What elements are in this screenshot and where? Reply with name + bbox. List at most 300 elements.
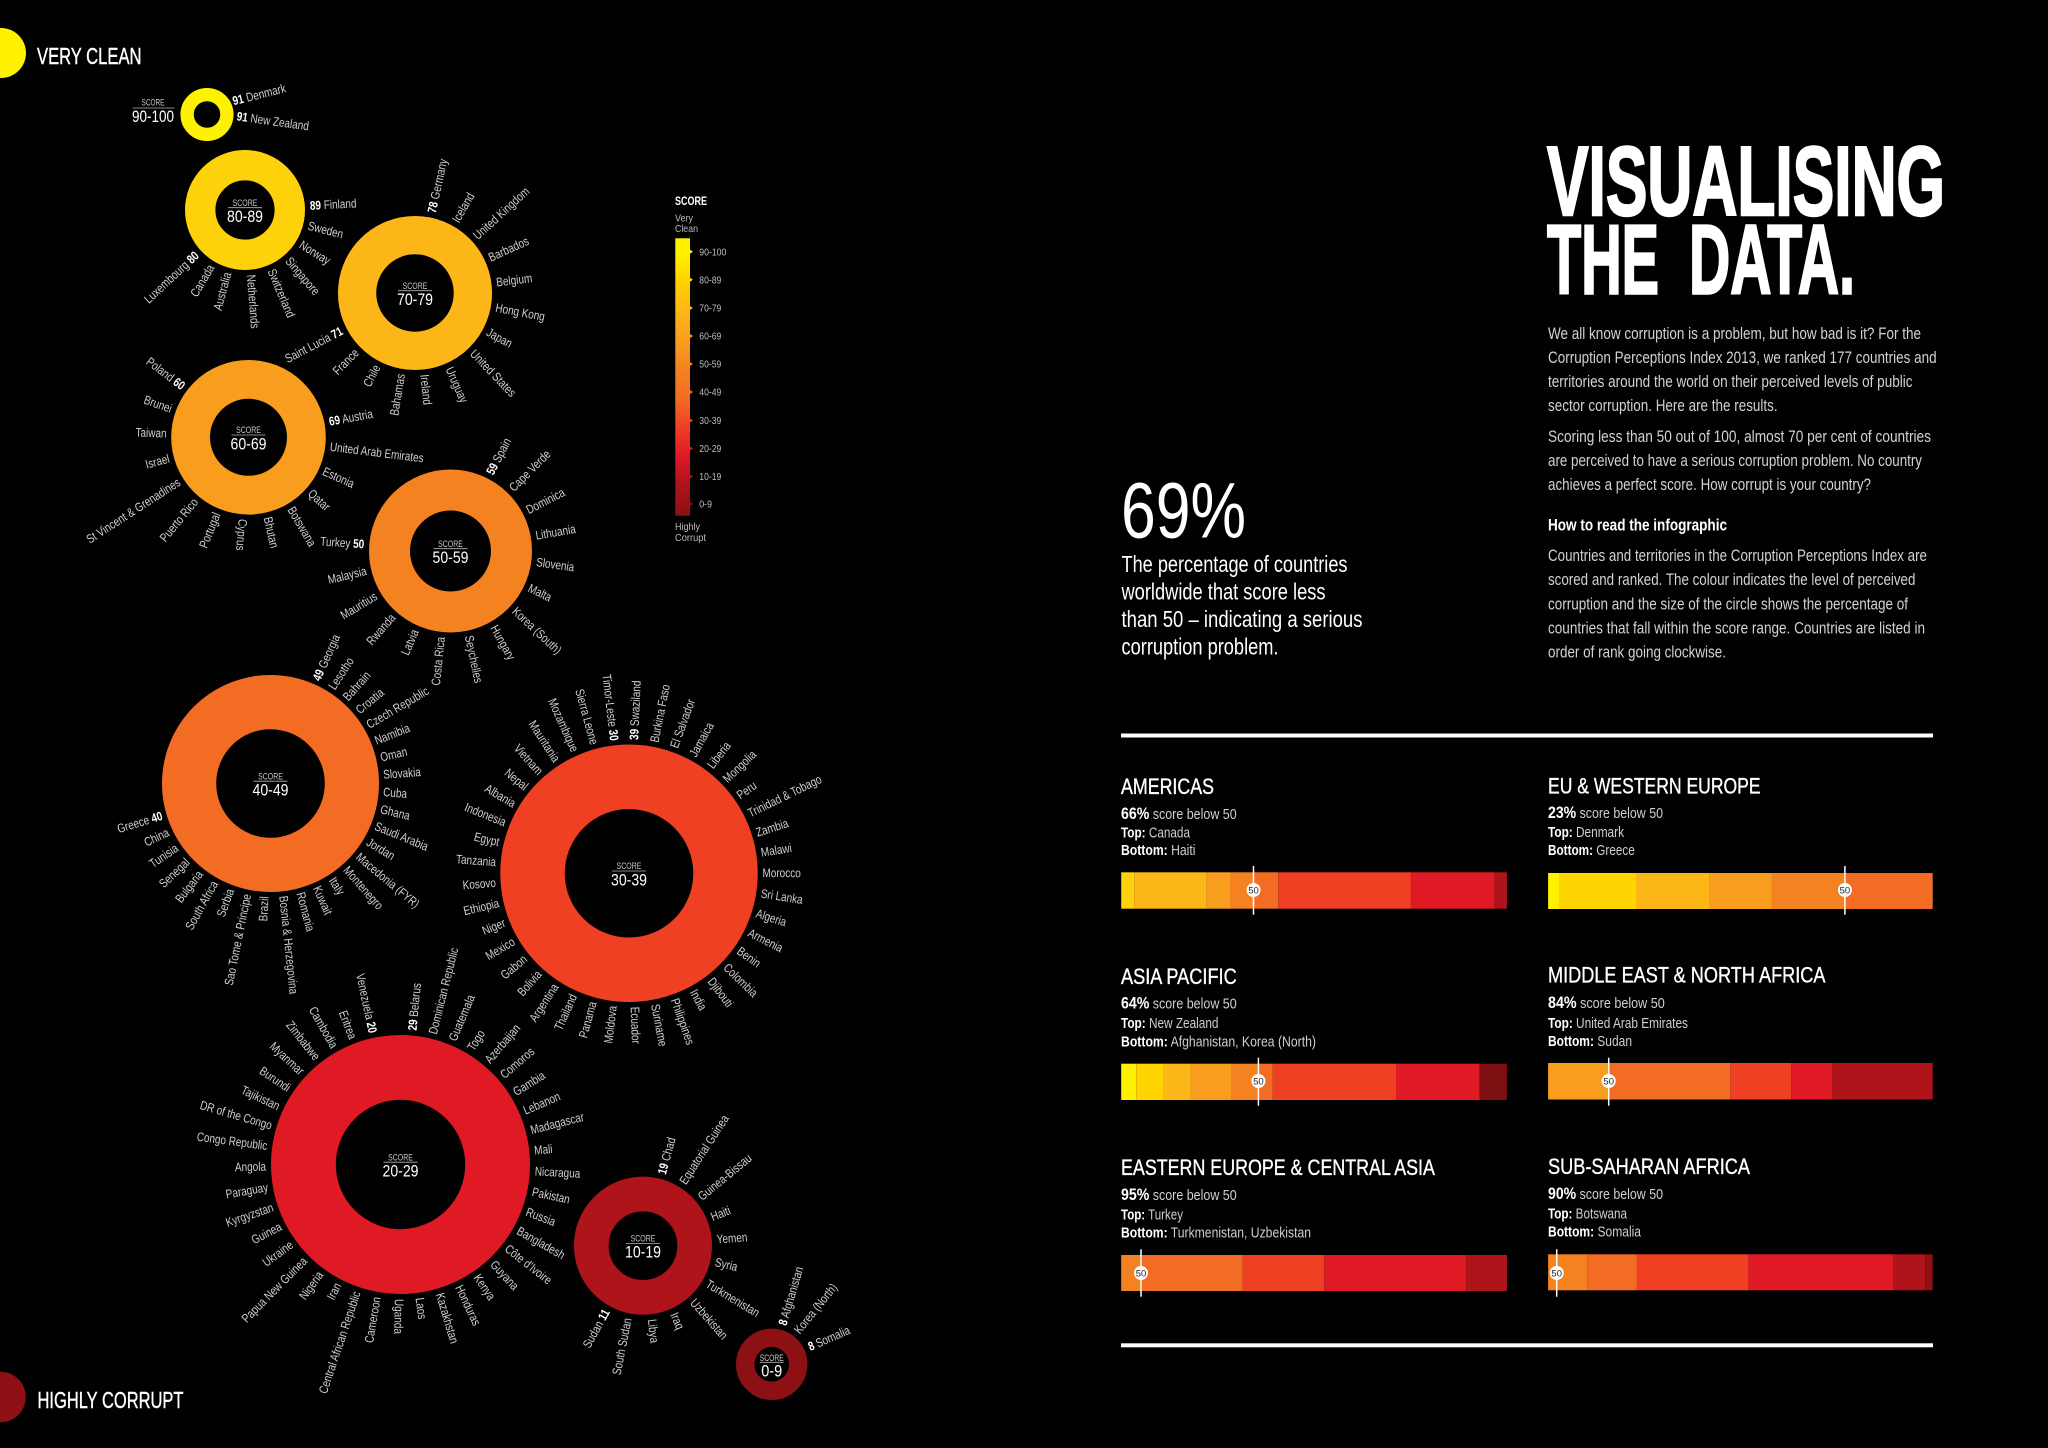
country labels 30-39: Albania	[482, 782, 518, 811]
country labels 20-29: Bangladesh	[514, 1225, 567, 1262]
country labels 20-29: Dominican Republic	[427, 946, 462, 1036]
country labels 60-69: Cyprus	[233, 519, 249, 551]
country labels 70-79: Japan	[484, 326, 514, 351]
country labels 40-49: Jordan	[364, 836, 397, 863]
marker: 50: 50	[1603, 1076, 1614, 1088]
panel: score 70-79 ring: SCORE	[403, 281, 427, 291]
country labels 70-79	[283, 158, 546, 417]
country labels 40-49: Namibia	[373, 722, 413, 748]
country labels 20-29: Zimbabwe	[283, 1019, 322, 1063]
callout: 69 percent: corruption problem.	[1122, 634, 1278, 660]
panel: score 40-49 ring: SCORE	[258, 771, 283, 781]
country labels 20-29: Madagascar	[529, 1111, 586, 1137]
text block: introduction: sector corruption. Here are the results.	[1548, 396, 1778, 415]
country labels 20-29: DR of the Congo	[198, 1099, 273, 1133]
marker: 50	[1246, 866, 1260, 915]
bar: Sub-Saharan Africa	[1548, 1254, 1933, 1290]
country labels 60-69: United Arab Emirates	[329, 441, 425, 466]
panel: Americas: 66% score below 50	[1121, 804, 1237, 823]
country labels 50-59: Mauritius	[339, 590, 380, 623]
panel: score 50-59 ring: SCORE	[438, 539, 463, 549]
country labels 80-89: Switzerland	[264, 267, 297, 320]
country labels 20-29: Central African Republic	[317, 1290, 364, 1396]
country labels 20-29: Venezuela 20	[353, 973, 379, 1034]
country labels 20-29: 29 Belarus	[407, 982, 424, 1031]
country labels 20-29: Laos	[412, 1297, 428, 1320]
country labels 50-59: Malta	[526, 582, 554, 605]
country labels 80-89: 89 Finland	[310, 198, 357, 213]
country labels 50-59: Korea (South)	[509, 605, 564, 658]
text block: introduction: are perceived to have a serious corruption problem. No country	[1548, 451, 1922, 470]
panel: EU and Western Europe: Bottom: Greece	[1548, 842, 1635, 859]
panel: score 70-79 ring	[283, 158, 546, 417]
panel: EU and Western Europe: 23% score below 50	[1548, 803, 1663, 822]
marker: 50: 50	[1840, 886, 1850, 896]
country labels 30-39: Morocco	[762, 867, 801, 881]
panel: score 40-49 ring	[116, 632, 432, 995]
panel: Eastern Europe and Central Asia: Bottom: Turkmenistan, Uzbekistan	[1121, 1224, 1311, 1241]
country labels 30-39: Trinidad & Tobago	[746, 773, 824, 821]
panel: Middle East and North Africa: Bottom: Sudan	[1548, 1033, 1632, 1050]
country labels 40-49: Serbia	[215, 887, 238, 919]
country labels 30-39: Burkina Faso	[649, 683, 673, 744]
text block: introduction: territories around the world on their perceived levels of public	[1548, 372, 1913, 391]
country labels 50-59: Turkey 50	[320, 536, 365, 552]
panel: Middle East and North Africa: Top: United Arab Emirates	[1548, 1015, 1688, 1032]
country labels 60-69: 69 Austria	[328, 408, 375, 429]
country labels 20-29: Guinea	[250, 1220, 285, 1247]
country labels 50-59: Rwanda	[365, 611, 399, 648]
country labels 50-59: Seychelles	[462, 634, 484, 685]
country labels 0-9: Korea (North)	[792, 1281, 841, 1337]
bar: Middle East and North Africa	[1548, 1063, 1933, 1100]
country labels 30-39: Ecuador	[627, 1006, 642, 1044]
country labels 70-79: Saint Lucia 71	[283, 325, 345, 366]
country labels 10-19	[581, 1112, 761, 1376]
legend: score colour scale: 10-19	[699, 472, 722, 483]
panel: score 60-69 ring: SCORE	[236, 425, 261, 435]
country labels 80-89: Singapore	[282, 255, 322, 298]
text block: how to read	[1548, 546, 1927, 662]
legend: score colour scale: Clean	[675, 224, 698, 235]
country labels 20-29: Angola	[235, 1161, 267, 1175]
panel: score 90-100 ring: SCORE	[142, 98, 164, 108]
marker: 50	[1838, 866, 1852, 915]
marker: 50: 50	[1248, 886, 1259, 896]
country labels 40-49: Bosnia & Herzegovina	[276, 895, 300, 995]
country labels 30-39	[456, 674, 824, 1048]
country labels 30-39: India	[687, 988, 709, 1013]
country labels 20-29: Ukraine	[260, 1239, 296, 1270]
panel: EU and Western Europe: Top: Denmark	[1548, 824, 1624, 841]
country labels 80-89: Sweden	[306, 220, 345, 242]
country labels 10-19: Libya	[645, 1319, 660, 1344]
country labels 60-69: Estonia	[320, 465, 357, 492]
country labels 40-49: Ghana	[379, 803, 412, 823]
text block: how to read: order of rank going clockwise.	[1548, 642, 1726, 662]
panel: Eastern Europe and Central Asia: EASTERN EUROPE & CENTRAL ASIA	[1121, 1155, 1435, 1180]
legend: score colour scale: 70-79	[699, 304, 722, 315]
country labels 60-69: St Vincent & Grenadines	[84, 476, 184, 547]
country labels 20-29	[196, 946, 586, 1396]
country labels 70-79: Bahamas	[388, 373, 408, 417]
country labels 40-49: Oman	[379, 746, 409, 765]
country labels 50-59: Costa Rica	[430, 636, 448, 686]
panel: score 10-19 ring: 10-19	[625, 1244, 661, 1262]
text block: introduction: Corruption Perceptions Index 2013, we ranked 177 countries and	[1548, 348, 1937, 367]
panel: score 50-59 ring	[320, 436, 577, 686]
country labels 30-39: Peru	[735, 779, 760, 802]
country labels 40-49: Macedonia (FYR)	[353, 851, 422, 911]
panel: Asia Pacific: ASIA PACIFIC	[1121, 964, 1237, 989]
country labels 60-69: Poland 60	[143, 355, 187, 393]
country labels 10-19: Yemen	[716, 1231, 748, 1247]
country labels 30-39: Sri Lanka	[760, 888, 804, 907]
country labels 20-29: Cameroon	[363, 1296, 384, 1344]
country labels 20-29: Comoros	[498, 1045, 538, 1082]
legend: score colour scale: Highly	[675, 522, 700, 533]
country labels 20-29: Guyana	[487, 1259, 521, 1294]
country labels 20-29: Uganda	[391, 1299, 405, 1335]
country labels 20-29: Azerbaijan	[483, 1022, 524, 1067]
panel: Eastern Europe and Central Asia: 95% score below 50	[1121, 1185, 1237, 1204]
country labels 40-49: Romania	[293, 891, 316, 934]
country labels 60-69: Taiwan	[135, 427, 167, 441]
country labels 30-39: Armenia	[746, 927, 785, 956]
country labels 40-49: Greece 40	[116, 810, 164, 836]
country labels 50-59: Malaysia	[327, 565, 369, 587]
country labels 20-29: Gambia	[511, 1069, 548, 1099]
country labels 30-39: Mozambique	[545, 697, 580, 754]
country labels 40-49: Saudi Arabia	[373, 820, 431, 854]
country labels 20-29: Myanmar	[267, 1040, 306, 1078]
country labels 20-29: Iran	[325, 1281, 345, 1302]
country labels 70-79: Chile	[362, 363, 384, 389]
country labels 30-39: Malawi	[760, 842, 793, 860]
bar: Asia Pacific	[1121, 1064, 1507, 1100]
country labels 50-59: Slovenia	[535, 556, 576, 575]
country labels 30-39: El Salvador	[668, 697, 698, 750]
text block: introduction: Scoring less than 50 out of 100, almost 70 per cent of countries	[1548, 427, 1931, 446]
bar: Eastern Europe and Central Asia	[1121, 1255, 1507, 1291]
country labels 40-49: Kuwait	[310, 884, 334, 918]
country labels 40-49: Slovakia	[383, 766, 422, 782]
panel: score 60-69 ring	[84, 355, 425, 551]
marker: 50: 50	[1136, 1268, 1146, 1280]
legend: score colour scale: 50-59	[699, 360, 722, 371]
country labels 40-49: Cuba	[383, 786, 408, 801]
panel: score 10-19 ring	[581, 1112, 761, 1376]
country labels 30-39: Mauritania	[525, 719, 562, 765]
country labels 40-49: Brazil	[257, 896, 272, 922]
country labels 30-39: Zambia	[754, 817, 791, 840]
text block: how to read: Countries and territories in the Corruption Perceptions Index are	[1548, 546, 1927, 565]
legend: score colour scale: 60-69	[699, 332, 722, 343]
key: very clean: VERY CLEAN	[37, 43, 142, 69]
country labels 60-69: Qatar	[305, 487, 332, 514]
country labels 20-29: Paraguay	[225, 1181, 269, 1202]
country labels 90-100: 91 New Zealand	[236, 110, 310, 134]
country labels 80-89: Netherlands	[243, 274, 261, 329]
country labels 30-39: Ethiopia	[462, 897, 501, 918]
panel: Sub-Saharan Africa: Bottom: Somalia	[1548, 1224, 1642, 1241]
callout: 69 percent: than 50 – indicating a serious	[1122, 606, 1362, 632]
country labels 30-39: Algeria	[754, 908, 788, 930]
country labels 60-69	[84, 355, 425, 551]
country labels 30-39: Philippines	[668, 997, 696, 1047]
panel: score 30-39 ring: SCORE	[617, 861, 641, 871]
marker: 50	[1134, 1249, 1148, 1297]
country labels 60-69: Botswana	[284, 505, 318, 550]
panel: Sub-Saharan Africa: Top: Botswana	[1548, 1206, 1628, 1223]
panel: score 30-39 ring	[456, 674, 824, 1048]
country labels 30-39: Mongolia	[721, 748, 760, 786]
panel: score 0-9 ring: SCORE	[760, 1353, 784, 1363]
country labels 70-79: United States	[467, 348, 518, 400]
country labels 30-39: Niger	[481, 917, 508, 938]
country labels 30-39: Colombia	[720, 961, 760, 1001]
legend: score colour scale: Corrupt	[675, 533, 706, 544]
country labels 20-29: Nigeria	[297, 1269, 327, 1303]
country labels 10-19: Turkmenistan	[703, 1278, 761, 1320]
country labels 30-39: Timor-Leste 30	[599, 674, 620, 741]
panel: score 10-19 ring: SCORE	[631, 1233, 655, 1243]
country labels 10-19: Sudan 11	[581, 1307, 613, 1351]
country labels 30-39: Egypt	[473, 831, 501, 850]
country labels 30-39: Moldova	[602, 1004, 620, 1044]
callout: 69 percent: 69%	[1121, 466, 1246, 554]
callout: 69 percent: worldwide that score less	[1121, 578, 1326, 604]
text block: how to read: countries that fall within the score range. Countries are listed in	[1548, 618, 1925, 638]
title: THE	[1547, 204, 1659, 314]
panel: EU and Western Europe	[1548, 773, 1933, 915]
panel: score 80-89 ring	[142, 165, 357, 329]
country labels 50-59: Hungary	[487, 623, 517, 663]
country labels 90-100	[231, 82, 310, 134]
country labels 60-69: Israel	[144, 453, 171, 472]
country labels 60-69: Puerto Rico	[158, 496, 201, 545]
panel: score 90-100 ring	[132, 82, 310, 134]
legend: score colour scale: 30-39	[699, 416, 722, 427]
panel: score 50-59 ring: 50-59	[432, 549, 468, 567]
country labels 0-9: 8 Afghanistan	[777, 1265, 807, 1327]
country labels 30-39: Indonesia	[462, 801, 508, 830]
legend: score colour scale: 40-49	[699, 388, 722, 399]
heading: how to read: How to read the infographic	[1548, 516, 1727, 535]
country labels 50-59: 59 Spain	[485, 436, 515, 477]
country labels 70-79: United Kingdom	[471, 185, 533, 243]
country labels 30-39: Suriname	[648, 1003, 669, 1048]
country labels 30-39: Thailand	[553, 992, 580, 1033]
panel: Americas: Top: Canada	[1121, 824, 1191, 841]
country labels 20-29: Lebanon	[522, 1090, 563, 1118]
country labels 80-89: Australia	[212, 270, 235, 312]
panel: score 0-9 ring: 0-9	[761, 1362, 782, 1380]
country labels 10-19: Uzbekistan	[687, 1297, 730, 1342]
country labels 20-29: Papua New Guinea	[240, 1255, 311, 1326]
panel: Americas: AMERICAS	[1121, 774, 1214, 799]
country labels 30-39: Tanzania	[456, 853, 497, 870]
panel: Sub-Saharan Africa: 90% score below 50	[1548, 1184, 1663, 1203]
panel: Eastern Europe and Central Asia: Top: Turkey	[1121, 1206, 1183, 1223]
title: DATA.	[1689, 204, 1855, 314]
country labels 30-39: Bolivia	[515, 968, 545, 999]
country labels 40-49	[116, 632, 432, 995]
country labels 10-19: South Sudan	[611, 1317, 635, 1376]
bar: EU and Western Europe	[1548, 873, 1933, 909]
panel: Americas	[1121, 774, 1507, 915]
panel: Middle East and North Africa: MIDDLE EAST & NORTH AFRICA	[1548, 963, 1826, 988]
country labels 70-79: 78 Germany	[426, 158, 451, 214]
legend: score colour scale: Very	[675, 214, 693, 225]
country labels 60-69: Portugal	[198, 511, 224, 550]
country labels 30-39: Jamaica	[688, 720, 717, 760]
country labels 20-29: Eritrea	[336, 1009, 359, 1042]
country labels 30-39: Vietnam	[511, 742, 545, 778]
country labels 50-59: Latvia	[399, 627, 422, 657]
country labels 40-49: Czech Republic	[365, 685, 432, 732]
country labels 20-29: Côte d'Ivoire	[502, 1243, 554, 1288]
country labels 30-39: 39 Swaziland	[628, 680, 644, 740]
country labels 0-9	[777, 1265, 853, 1354]
panel: score 80-89 ring: 80-89	[227, 208, 263, 226]
country labels 80-89	[142, 198, 357, 329]
legend: score colour scale	[675, 196, 727, 544]
country labels 40-49: 49 Georgia	[311, 632, 344, 683]
country labels 20-29: Pakistan	[531, 1186, 571, 1207]
marker: 50	[1550, 1249, 1564, 1297]
country labels 60-69: Bhutan	[260, 516, 280, 550]
country labels 20-29: Guatemala	[447, 993, 478, 1043]
panel: score 70-79 ring: 70-79	[397, 291, 433, 309]
panel: score 20-29 ring: 20-29	[382, 1162, 418, 1180]
country labels 20-29: Kyrgyzstan	[224, 1202, 275, 1230]
text block: introduction: achieves a perfect score. How corrupt is your country?	[1548, 475, 1871, 494]
country labels 30-39: Gabon	[499, 953, 530, 982]
panel: score 20-29 ring	[196, 946, 586, 1396]
key: highly corrupt	[0, 1372, 184, 1422]
marker: 50	[1251, 1058, 1265, 1106]
country labels 30-39: Benin	[734, 945, 763, 971]
country labels 70-79: Iceland	[450, 191, 478, 225]
country labels 40-49: Tunisia	[147, 842, 182, 871]
country labels 80-89: Luxembourg 80	[142, 249, 202, 306]
country labels 40-49: Senegal	[157, 856, 193, 891]
country labels 30-39: Sierra Leone	[572, 688, 600, 746]
country labels 30-39: Djibouti	[704, 976, 735, 1010]
text block: introduction	[1548, 324, 1937, 494]
country labels 50-59	[320, 436, 577, 686]
callout: 69 percent: The percentage of countries	[1122, 551, 1348, 577]
country labels 30-39: Kosovo	[462, 877, 496, 893]
panel: Asia Pacific: Top: New Zealand	[1121, 1015, 1218, 1032]
legend: score colour scale: 80-89	[699, 275, 722, 286]
panel: score 60-69 ring: 60-69	[230, 435, 266, 453]
country labels 70-79: France	[331, 347, 362, 378]
country labels 20-29: Togo	[466, 1028, 488, 1054]
panel: Sub-Saharan Africa: SUB-SAHARAN AFRICA	[1548, 1154, 1750, 1179]
panel: Middle East and North Africa: 84% score below 50	[1548, 993, 1665, 1012]
bar: Americas	[1121, 872, 1507, 909]
panel: score 30-39 ring: 30-39	[611, 871, 647, 889]
country labels 70-79: Uruguay	[442, 365, 470, 405]
country labels 30-39: Panama	[577, 1000, 600, 1040]
panel: score 20-29 ring: SCORE	[388, 1152, 413, 1162]
country labels 70-79: Hong Kong	[494, 302, 546, 324]
country labels 90-100: 91 Denmark	[231, 82, 288, 108]
country labels 20-29: Congo Republic	[196, 1131, 268, 1153]
country labels 20-29: Mali	[534, 1143, 553, 1158]
text block: introduction: We all know corruption is a problem, but how bad is it? For the	[1548, 324, 1921, 343]
country labels 40-49: Lesotho	[327, 655, 357, 692]
country labels 80-89: Norway	[297, 239, 333, 268]
country labels 40-49: Bulgaria	[173, 868, 207, 906]
country labels 70-79: Barbados	[487, 235, 531, 265]
country labels 20-29: Russia	[524, 1206, 558, 1230]
country labels 40-49: Bahrain	[341, 669, 374, 704]
country labels 10-19: Iraq	[667, 1311, 686, 1332]
country labels 30-39: Mexico	[484, 936, 518, 963]
country labels 30-39: Nepal	[502, 767, 530, 793]
marker: 50	[1602, 1058, 1616, 1106]
panel: score 0-9 ring	[745, 1265, 853, 1391]
text block: how to read: corruption and the size of the circle shows the percentage of	[1548, 594, 1908, 613]
panel: Americas: Bottom: Haiti	[1121, 842, 1196, 859]
text block: how to read: scored and ranked. The colour indicates the level of perceived	[1548, 570, 1915, 589]
country labels 40-49: Italy	[326, 875, 347, 898]
country labels 80-89: Canada	[189, 262, 218, 299]
legend: score colour scale: 0-9	[699, 500, 712, 511]
panel: Sub-Saharan Africa	[1548, 1154, 1933, 1297]
panel: Eastern Europe and Central Asia	[1121, 1155, 1507, 1297]
country labels 20-29: Kazakhstan	[433, 1292, 460, 1345]
country labels 20-29: Burundi	[257, 1065, 293, 1095]
country labels 40-49: Montenegro	[340, 864, 385, 913]
country labels 10-19: Syria	[713, 1256, 739, 1275]
country labels 40-49: China	[142, 826, 172, 850]
legend: score colour scale: 90-100	[699, 247, 727, 258]
country labels 40-49: Croatia	[354, 686, 388, 717]
country labels 40-49: Sao Tome & Principe	[223, 893, 254, 987]
panel: EU and Western Europe: EU & WESTERN EUROPE	[1548, 773, 1761, 798]
country labels 20-29: Cambodia	[306, 1005, 340, 1051]
country labels 50-59: Dominica	[524, 486, 568, 517]
country labels 20-29: Tajikistan	[239, 1084, 282, 1113]
country labels 70-79: Belgium	[496, 272, 533, 290]
country labels 40-49: South Africa	[184, 878, 222, 932]
title	[1547, 126, 1945, 314]
country labels 30-39: Liberia	[705, 739, 734, 772]
key: highly corrupt: HIGHLY CORRUPT	[38, 1387, 184, 1413]
country labels 20-29: Nicaragua	[534, 1165, 581, 1181]
marker: 50: 50	[1551, 1268, 1562, 1280]
legend: score colour scale: SCORE	[675, 196, 707, 208]
country labels 50-59: Lithuania	[535, 523, 577, 543]
country labels 10-19: 19 Chad	[656, 1136, 679, 1176]
country labels 50-59: Cape Verde	[507, 448, 554, 495]
panel: Asia Pacific	[1121, 964, 1507, 1106]
country labels 10-19: Equatorial Guinea	[678, 1112, 732, 1187]
country labels 20-29: Kenya	[470, 1272, 498, 1304]
panel: score 40-49 ring: 40-49	[252, 782, 288, 800]
panel: score 90-100 ring: 90-100	[132, 108, 174, 126]
panel: Asia Pacific: Bottom: Afghanistan, Korea (North)	[1121, 1034, 1316, 1050]
callout: 69 percent	[1121, 466, 1362, 660]
legend: score colour scale: 20-29	[699, 444, 722, 455]
panel: Asia Pacific: 64% score below 50	[1121, 994, 1237, 1013]
panel: score 80-89 ring: SCORE	[233, 198, 257, 208]
country labels 30-39: Argentina	[527, 981, 562, 1025]
